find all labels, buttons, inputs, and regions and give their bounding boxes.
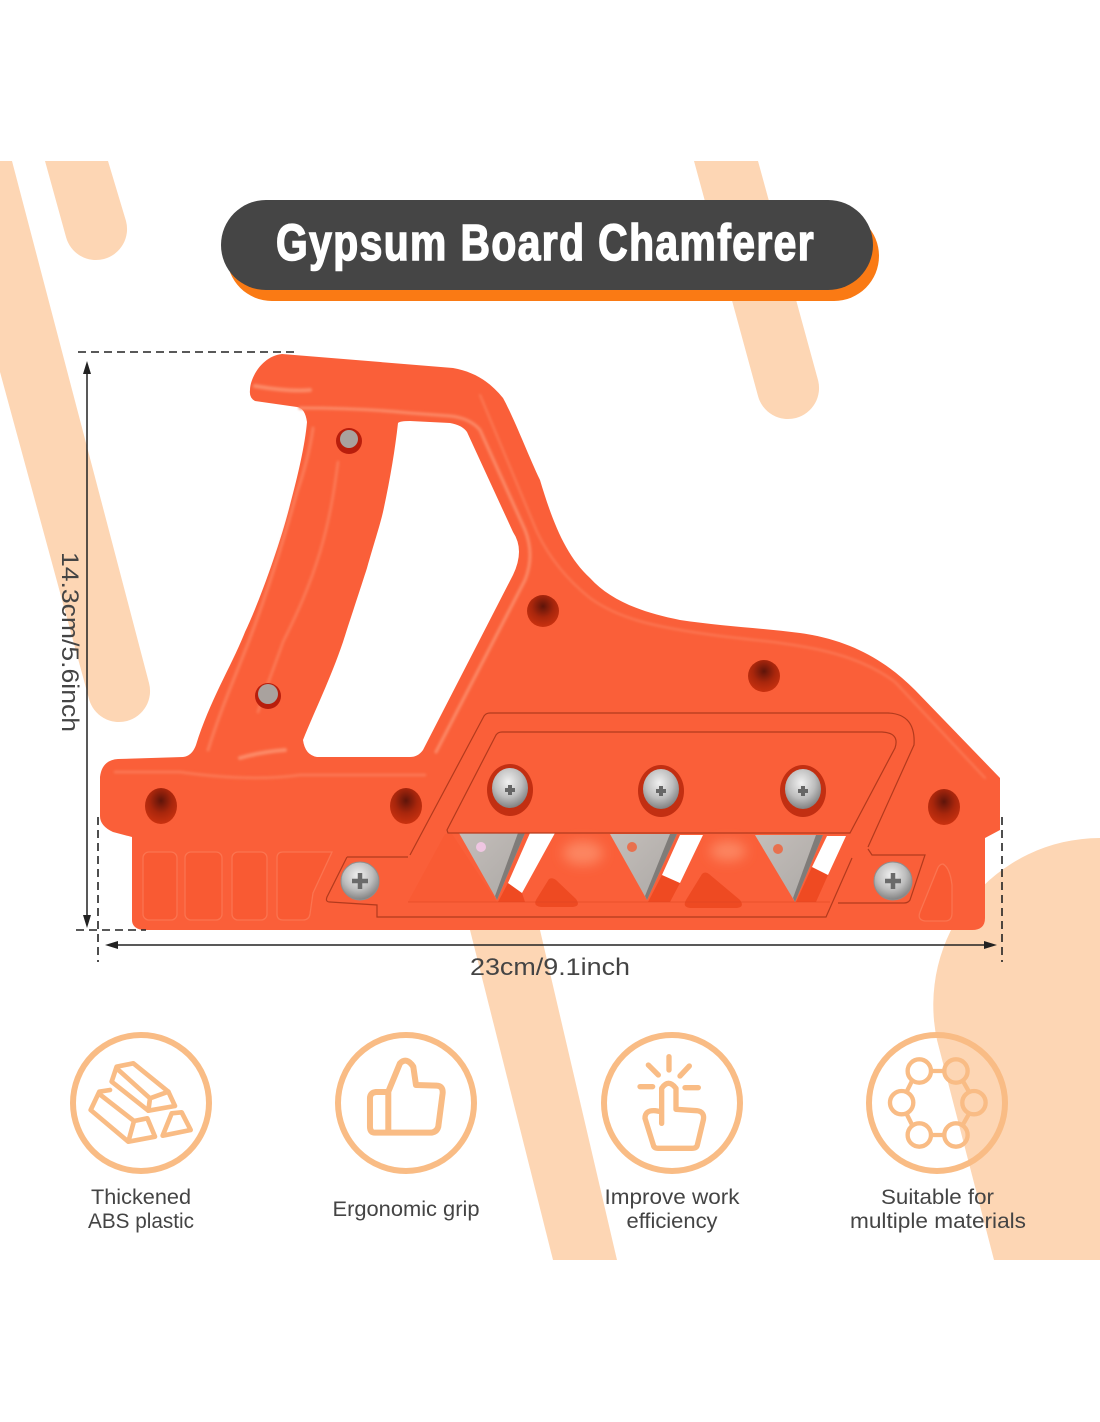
width dimension: 23cm/9.1inch — [470, 954, 630, 981]
icon: gold bars — [73, 1035, 209, 1171]
width dimension — [98, 817, 1002, 981]
icon: connected circles — [869, 1035, 1005, 1171]
title pill — [221, 200, 879, 301]
dark gaps under cutters — [498, 867, 828, 902]
base screws — [341, 862, 912, 900]
label: efficiency — [626, 1210, 718, 1233]
icon: tapping finger — [604, 1035, 740, 1171]
label: ABS plastic — [88, 1210, 194, 1233]
tool body — [100, 354, 1000, 930]
white cut-outs — [508, 833, 846, 893]
chamferer tool — [100, 354, 1000, 930]
cover plate outlines — [326, 713, 925, 917]
pillar highlights — [563, 841, 746, 865]
background decorative peach shapes — [0, 161, 1100, 1260]
height dimension: 14.3cm/5.6inch — [56, 552, 83, 732]
feature: improve work efficiency — [604, 1035, 740, 1233]
feature: suitable for multiple materials — [850, 1035, 1026, 1233]
label: Improve work — [604, 1186, 740, 1209]
label: Thickened — [91, 1186, 191, 1209]
plate screws — [487, 764, 826, 817]
grip and body highlights — [115, 386, 985, 778]
height dimension — [56, 352, 297, 930]
title pill: Gypsum Board Chamferer — [276, 214, 814, 271]
label: Ergonomic grip — [332, 1198, 480, 1221]
label: Suitable for — [881, 1186, 994, 1209]
icon: thumbs up — [338, 1035, 474, 1171]
recessed side panels — [143, 852, 952, 921]
feature: ergonomic grip — [332, 1035, 480, 1221]
body screw holes — [145, 428, 960, 825]
vent triangles — [535, 872, 742, 908]
blade slot interior — [408, 833, 846, 908]
label: multiple materials — [850, 1210, 1026, 1233]
feature: thickened ABS plastic — [73, 1035, 209, 1233]
steel blades — [459, 833, 823, 902]
